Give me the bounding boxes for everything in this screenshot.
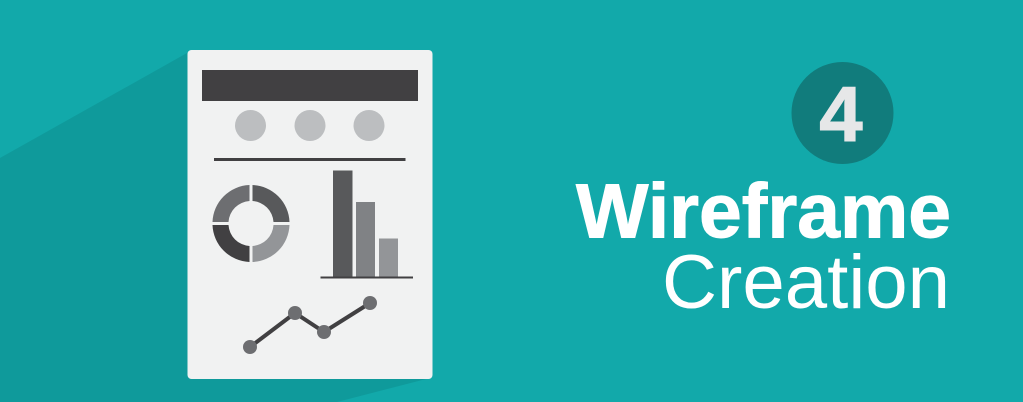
bar chart: [320, 170, 413, 278]
donut chart: [212, 185, 290, 262]
navigation circles: [235, 110, 384, 141]
long shadow of document: [0, 53, 430, 402]
title: Creation: Creation: [662, 240, 950, 325]
divider line: [214, 158, 406, 161]
line chart: [243, 296, 377, 354]
header bar: [202, 70, 418, 101]
panel: wireframe document: [188, 50, 432, 379]
step number badge: 4: [819, 70, 863, 158]
step number badge: [792, 62, 894, 164]
title: Wireframe: Wireframe: [576, 168, 951, 254]
